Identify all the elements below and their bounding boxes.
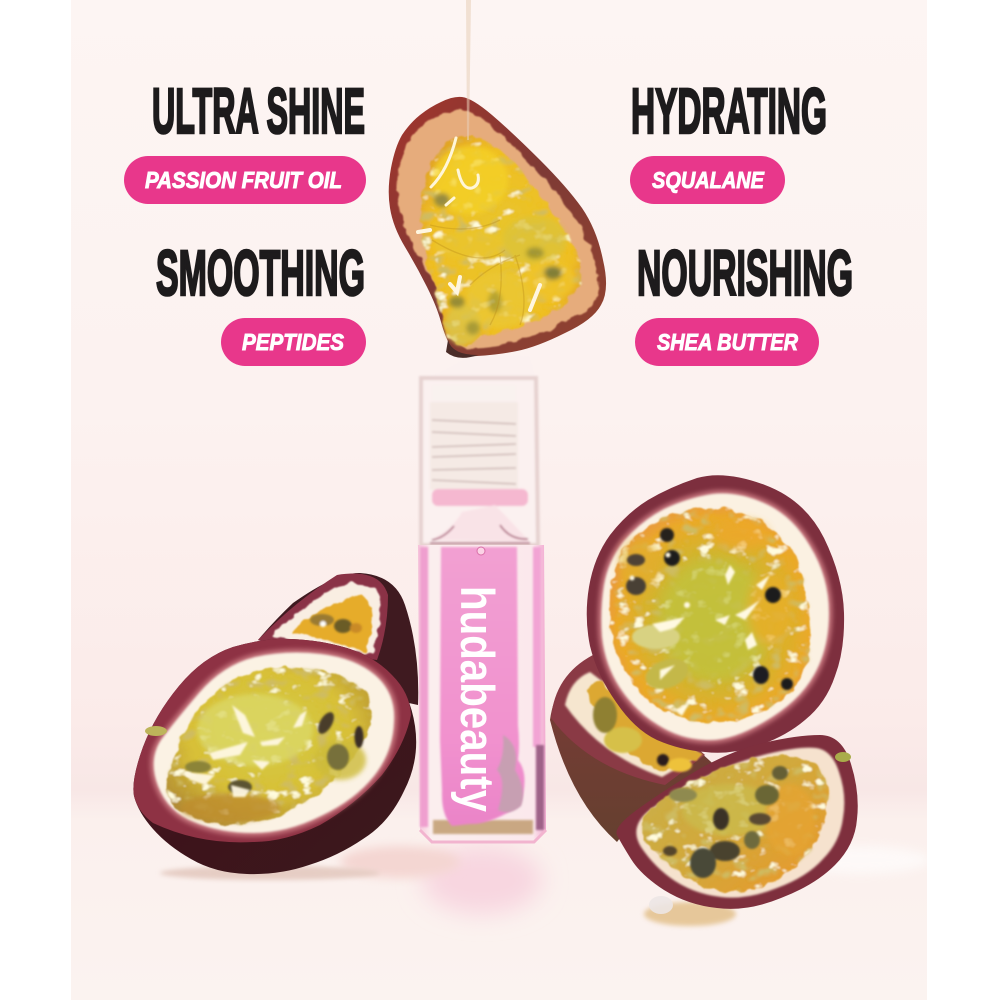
pill: squalane: SQUALANE: [652, 167, 765, 193]
oil drip: [466, 0, 471, 140]
pill: passion fruit oil: [124, 156, 366, 204]
front right passion fruit wedge: [616, 735, 858, 909]
front left fruit seeds and highlights: [145, 694, 366, 822]
back left passion fruit: [258, 573, 418, 705]
bottle body: [418, 545, 546, 842]
lip oil bottle: [418, 354, 546, 842]
behind right passion fruit: [550, 655, 720, 842]
pill: shea butter: SHEA BUTTER: [657, 329, 798, 355]
wedge seeds: [663, 752, 851, 878]
pill: shea butter: [635, 318, 819, 366]
applicator wand: [440, 547, 525, 826]
brand text on tube: hudabeauty: [451, 586, 504, 812]
top fruit flesh detail: [418, 138, 575, 358]
heading: ultra shine: ULTRA SHINE: [152, 75, 365, 147]
back left fruit seeds: [310, 614, 362, 633]
wand reflection: [497, 735, 523, 812]
pill: passion fruit oil: PASSION FRUIT OIL: [145, 167, 342, 193]
reflective table surface: [160, 846, 930, 914]
large right passion fruit: [587, 475, 844, 753]
top passion fruit with oil drip: [389, 0, 606, 358]
behind fruit seeds: [593, 697, 692, 772]
pill: peptides: [221, 318, 366, 366]
pill: squalane: [630, 156, 785, 204]
front left passion fruit: [133, 639, 416, 874]
bottle cap: [421, 354, 538, 545]
heading: hydrating: HYDRATING: [631, 75, 827, 147]
juice puddle: [644, 896, 736, 926]
heading: smoothing: SMOOTHING: [156, 237, 365, 309]
pill: peptides: PEPTIDES: [242, 329, 345, 355]
large right fruit seeds and highlights: [620, 521, 793, 716]
